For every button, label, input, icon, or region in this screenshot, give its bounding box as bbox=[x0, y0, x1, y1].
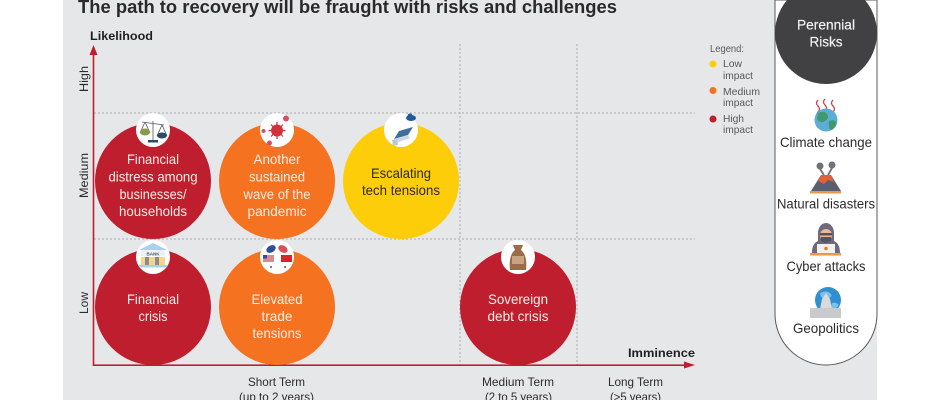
risk: another wave of the pandemic: wave of the bbox=[243, 186, 311, 202]
risk: sovereign debt crisis bbox=[460, 240, 576, 365]
risk: financial distress: businesses/ bbox=[120, 186, 187, 202]
icon: volcano bbox=[810, 162, 841, 194]
risk: financial distress: Financial bbox=[127, 151, 179, 167]
x axis label: Imminence: Imminence bbox=[628, 346, 695, 360]
risk: another wave of the pandemic: Another bbox=[254, 151, 301, 167]
risk: financial distress: distress among bbox=[108, 168, 198, 184]
legend: impact bbox=[723, 124, 753, 136]
legend: Legend: bbox=[710, 43, 744, 55]
icon: debt bag bbox=[501, 240, 535, 274]
risk: another wave of the pandemic: pandemic bbox=[248, 203, 306, 219]
risk: elevated trade tensions: trade bbox=[262, 308, 293, 324]
icon: scales bbox=[136, 113, 170, 147]
risk: financial crisis: Financial bbox=[127, 291, 179, 307]
risk: elevated trade tensions: tensions bbox=[252, 325, 302, 341]
y axis levels bbox=[77, 66, 91, 314]
y axis levels: Low bbox=[77, 292, 91, 314]
y axis label: Likelihood: Likelihood bbox=[90, 29, 153, 43]
heading circle bbox=[775, 0, 877, 84]
risk: financial distress: households bbox=[119, 203, 187, 219]
risk: sovereign debt crisis: debt crisis bbox=[488, 308, 548, 324]
risk: financial crisis: crisis bbox=[138, 308, 168, 324]
x axis categories bbox=[239, 375, 663, 400]
panel: perennial risks bbox=[775, 0, 877, 365]
label: natural disasters: Natural disasters bbox=[777, 196, 875, 212]
label: geopolitics: Geopolitics bbox=[793, 320, 859, 336]
x axis categories: Long Term bbox=[608, 375, 663, 389]
icon: bank: BANK bbox=[146, 252, 160, 256]
icon: globe and capitol bbox=[810, 287, 841, 318]
risk: financial distress bbox=[95, 113, 211, 239]
grid lines bbox=[94, 44, 695, 365]
legend: impact bbox=[723, 97, 753, 109]
icon: virus bbox=[260, 113, 294, 147]
risk: sovereign debt crisis: Sovereign bbox=[488, 291, 548, 307]
risk: elevated trade tensions: Elevated bbox=[252, 291, 302, 307]
y axis levels: Medium bbox=[77, 153, 91, 198]
icon: laptop and cloud bbox=[384, 113, 418, 147]
risk: escalating tech tensions: Escalating bbox=[371, 165, 431, 181]
risk: escalating tech tensions bbox=[343, 113, 459, 239]
icon: hacker bbox=[810, 223, 841, 256]
legend: Low bbox=[723, 58, 742, 70]
risk: another wave of the pandemic: sustained bbox=[249, 168, 305, 184]
risk: escalating tech tensions: tech tensions bbox=[362, 182, 440, 198]
legend bbox=[710, 43, 760, 136]
label: cyber attacks: Cyber attacks bbox=[786, 258, 866, 274]
heading circle: Risks bbox=[810, 34, 842, 50]
y axis arrow bbox=[90, 45, 98, 366]
x axis categories: Short Term bbox=[248, 375, 305, 389]
x axis arrow bbox=[93, 362, 695, 368]
icon: climate change bbox=[814, 99, 838, 132]
legend: Medium bbox=[723, 86, 760, 98]
heading circle: Perennial bbox=[797, 16, 855, 32]
icon: boxing gloves and flags bbox=[260, 240, 294, 274]
y axis levels: High bbox=[77, 66, 91, 92]
risk: another wave of the pandemic bbox=[219, 113, 335, 239]
legend: impact bbox=[723, 70, 753, 82]
legend: High bbox=[723, 113, 744, 125]
risk: financial crisis bbox=[95, 240, 211, 365]
risk: elevated trade tensions bbox=[219, 240, 335, 365]
label: climate change: Climate change bbox=[780, 134, 872, 150]
x axis categories: Medium Term bbox=[482, 375, 554, 389]
